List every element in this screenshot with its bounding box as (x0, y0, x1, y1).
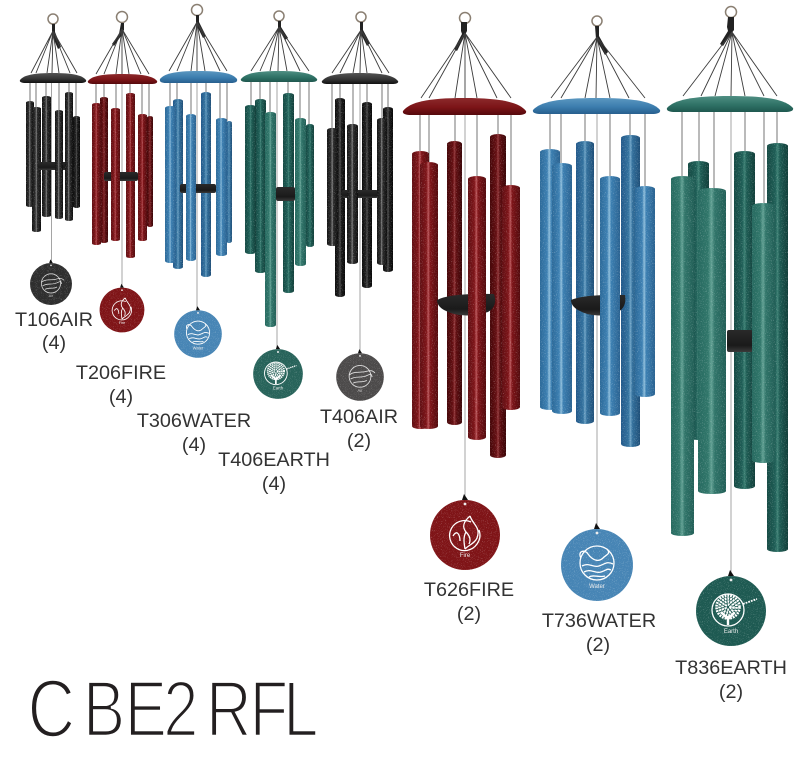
pendant disc (253, 345, 303, 399)
hanging ring (274, 11, 284, 21)
earth icon (712, 594, 757, 626)
fire icon (112, 298, 132, 320)
suspension strings (683, 32, 777, 96)
wind chime: T406AIR (322, 12, 398, 401)
suspension strings (96, 29, 149, 74)
hub (104, 172, 138, 181)
label: T836EARTH: (2) (719, 681, 743, 703)
wind chime: T306WATER (160, 4, 237, 358)
knot and tag (360, 22, 370, 46)
tube strings (332, 84, 388, 128)
hanging ring (116, 12, 128, 22)
dish (667, 96, 793, 112)
label: T626FIRE: (2) (457, 603, 481, 625)
label: T406EARTH: T406EARTH (218, 449, 330, 471)
front tubes (752, 143, 788, 552)
front tubes (111, 108, 153, 241)
tubes (26, 96, 51, 232)
wind chime: T736WATER (533, 16, 660, 601)
hub (571, 295, 625, 316)
label: T406EARTH (218, 449, 330, 495)
front tubes (347, 107, 393, 272)
hanging ring (48, 14, 58, 24)
front tubes (600, 176, 655, 416)
centre wire (464, 114, 466, 500)
front tubes (468, 176, 520, 440)
suspension strings (169, 22, 227, 71)
knot and tag (52, 24, 61, 49)
pendant disc: Air (49, 294, 54, 298)
front tubes (55, 92, 80, 221)
title: CBE2RFL: C (28, 663, 75, 754)
dish (403, 98, 526, 115)
tubes (412, 134, 506, 458)
tubes (671, 151, 755, 536)
centre wire (730, 112, 732, 576)
hub (437, 294, 495, 316)
wind chime: T836EARTH (667, 6, 793, 646)
hub (38, 162, 70, 170)
hub (276, 187, 295, 201)
hanging ring (356, 12, 366, 22)
hub (180, 184, 216, 193)
water icon (580, 546, 614, 580)
pendant disc: Earth (273, 386, 284, 391)
tube strings (170, 81, 227, 121)
tubes (540, 135, 640, 447)
label: T406EARTH: (4) (262, 473, 286, 495)
wind chime: T406EARTH (241, 11, 317, 399)
knot and tag (278, 21, 288, 40)
suspension strings (421, 33, 511, 98)
wind chime: T206FIRE (88, 12, 157, 332)
label: T736WATER: (2) (586, 634, 610, 656)
air icon (41, 274, 64, 293)
dish (533, 98, 660, 114)
tubes (92, 93, 135, 258)
label: T306WATER: (4) (182, 434, 206, 456)
knot and tag (112, 23, 124, 46)
tubes (327, 98, 372, 297)
hanging ring (726, 6, 736, 18)
knot and tag (595, 26, 608, 55)
centre wire (121, 82, 123, 288)
tube strings (420, 114, 511, 185)
hanging ring (192, 4, 202, 16)
tubes (165, 92, 211, 277)
label: T206FIRE (76, 362, 166, 408)
label: T836EARTH (675, 657, 787, 703)
air icon (349, 365, 375, 387)
label: T106AIR: (4) (42, 332, 66, 354)
hub (727, 330, 753, 352)
label: T306WATER: T306WATER (137, 410, 251, 432)
pendant disc: Water (193, 346, 204, 351)
label: T626FIRE (424, 579, 514, 625)
tube strings (251, 81, 309, 124)
centre wire (50, 80, 52, 262)
label: T406AIR: (2) (347, 430, 371, 452)
suspension strings (31, 31, 77, 73)
centre wire (596, 114, 598, 530)
dish (241, 71, 317, 82)
label: T206FIRE: (4) (109, 386, 133, 408)
tube strings (550, 114, 645, 186)
fire icon (450, 516, 480, 551)
dish (20, 73, 86, 83)
wind chime: T106AIR (20, 14, 86, 305)
pendant disc: Water (589, 584, 605, 590)
centre wire (359, 84, 361, 354)
knot and tag (454, 22, 467, 51)
earth icon (265, 362, 296, 385)
dish (88, 74, 157, 84)
pendant disc (430, 494, 500, 570)
centre wire (276, 81, 278, 349)
pendant disc (30, 259, 72, 305)
pendant disc: Air (358, 388, 363, 393)
label: T106AIR (15, 309, 93, 354)
pendant disc (336, 349, 384, 401)
pendant disc: Earth (724, 629, 738, 635)
hanging ring (460, 12, 470, 24)
label: T736WATER (542, 610, 656, 656)
pendant disc: Fire (460, 553, 471, 559)
label: T626FIRE: T626FIRE (424, 579, 514, 601)
tube strings (96, 82, 149, 116)
tube strings (682, 112, 777, 203)
front tubes (186, 114, 232, 261)
water icon (186, 321, 210, 344)
label: T206FIRE: T206FIRE (76, 362, 166, 384)
knot and tag (720, 17, 734, 46)
knot and tag (196, 15, 206, 38)
label: T406AIR: T406AIR (320, 406, 398, 428)
wind chime: T626FIRE (403, 12, 526, 570)
label: T106AIR: T106AIR (15, 309, 93, 331)
label: T736WATER: T736WATER (542, 610, 656, 632)
label: T306WATER (137, 410, 251, 456)
pendant disc (561, 523, 633, 601)
suspension strings (551, 37, 645, 98)
tubes (245, 93, 294, 327)
title: CBE2RFL: BE2RFL (83, 665, 318, 754)
hanging ring (592, 16, 602, 26)
pendant disc (174, 306, 222, 358)
pendant disc: Fire (119, 321, 125, 325)
label: T836EARTH: T836EARTH (675, 657, 787, 679)
pendant disc (696, 570, 766, 646)
hub (342, 190, 378, 198)
tube strings (30, 80, 76, 116)
suspension strings (251, 27, 309, 71)
dish (322, 73, 398, 84)
front tubes (295, 118, 314, 266)
suspension strings (332, 30, 389, 73)
dish (160, 71, 237, 83)
pendant disc (100, 284, 144, 332)
centre wire (196, 81, 198, 311)
label: T406AIR (320, 406, 398, 452)
